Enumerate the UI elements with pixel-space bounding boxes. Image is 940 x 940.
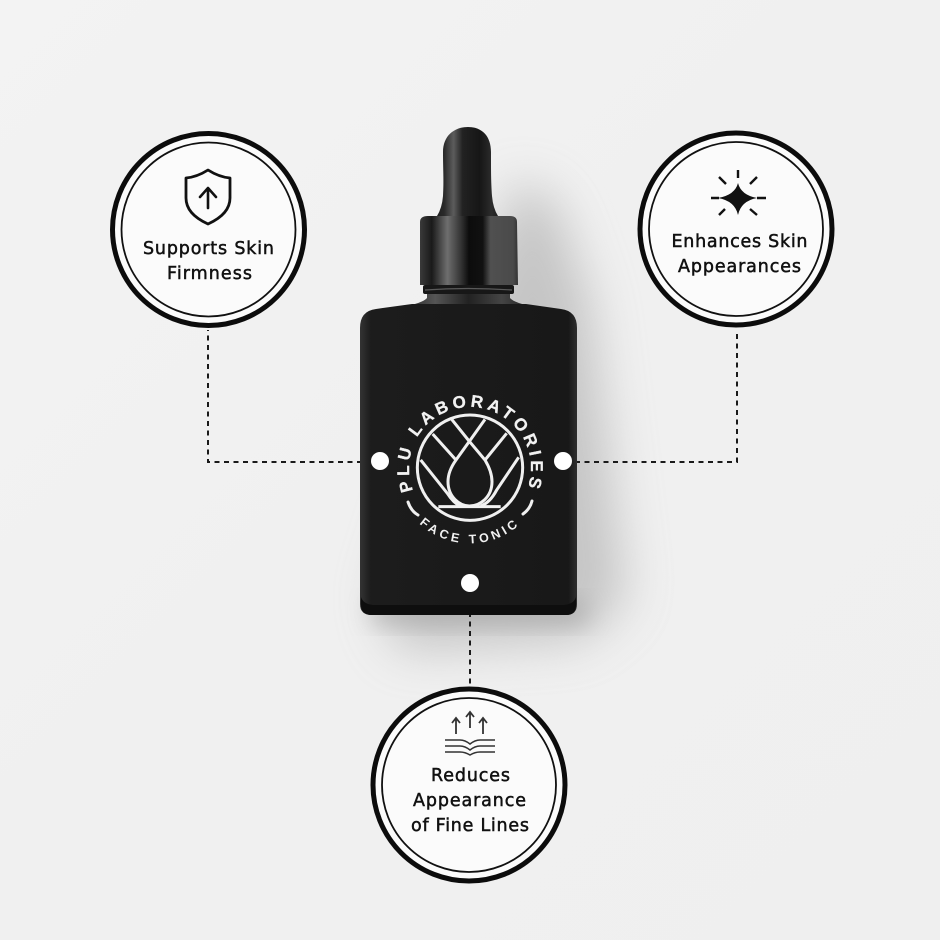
callout: supports skin firmness	[112, 134, 304, 326]
label: Reduces	[431, 766, 510, 786]
connector: right dashed line	[575, 330, 737, 462]
icon: arrows over lines	[445, 712, 495, 755]
bottle	[360, 127, 577, 615]
marker dot: right	[554, 452, 572, 470]
logo arc text: PLU LABORATORIES	[397, 394, 543, 493]
icon: shield with arrow	[186, 170, 230, 224]
bottle shadow	[372, 180, 625, 650]
logo	[397, 394, 543, 544]
marker dot: bottom	[461, 574, 479, 592]
dropper bulb	[437, 127, 498, 216]
logo subtitle: FACE TONIC	[420, 517, 517, 544]
label: of Fine Lines	[411, 816, 529, 836]
marker dot: left	[371, 452, 389, 470]
label: Firmness	[167, 264, 252, 284]
logo side dashes	[408, 501, 532, 515]
connector: bottom dashed line	[469, 612, 471, 688]
label: Enhances Skin	[672, 232, 808, 252]
label: Supports Skin	[143, 239, 274, 259]
neck	[402, 294, 535, 307]
collar ring	[423, 285, 514, 294]
connector: left dashed line	[208, 330, 362, 462]
label: Appearances	[678, 257, 801, 277]
callout: reduces appearance of fine lines	[373, 689, 565, 881]
label: Appearance	[413, 791, 526, 811]
logo emblem	[417, 415, 523, 520]
body	[360, 304, 577, 615]
collar	[420, 216, 518, 285]
callout: enhances skin appearances	[640, 133, 832, 325]
icon: sparkle	[711, 170, 766, 215]
